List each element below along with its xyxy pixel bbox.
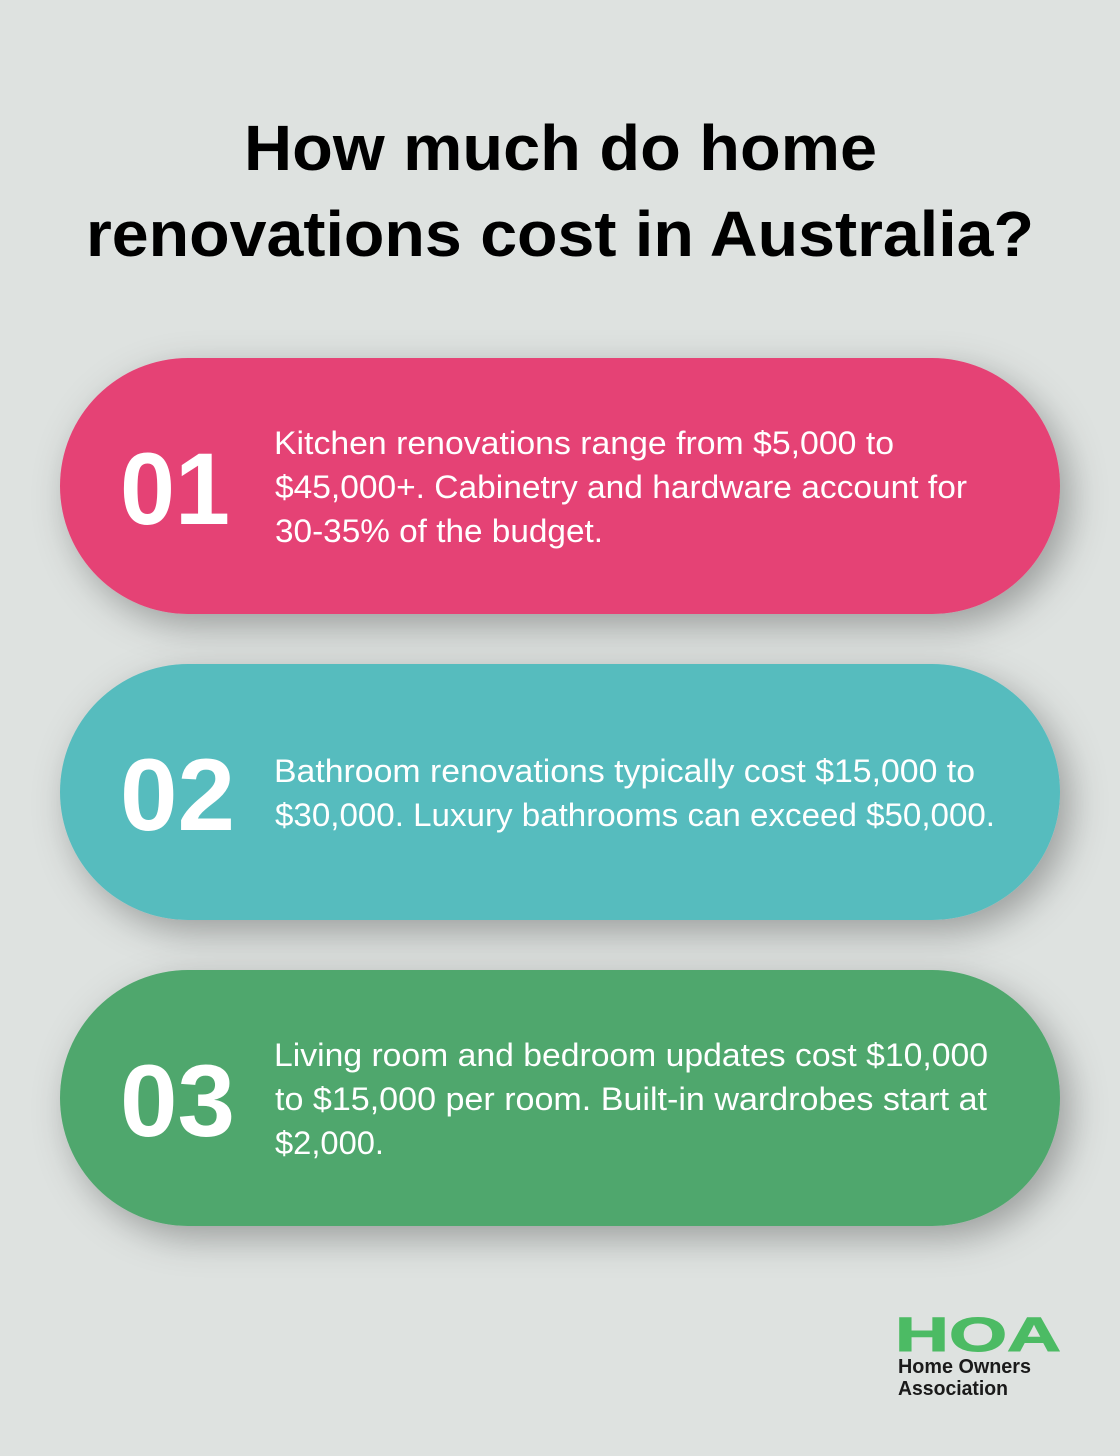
logo: Home Owners Association: HOA (895, 1309, 1061, 1362)
living room text (274, 1037, 988, 1161)
number 01: 01 (120, 432, 230, 546)
pink pill background (60, 358, 1060, 614)
title: renovations cost in Australia? (86, 198, 1034, 270)
kitchen text: Kitchen renovations range from $5,000 to (274, 425, 894, 461)
panel: living room and bedroom updates (60, 970, 1060, 1226)
kitchen text: 30-35% of the budget. (275, 513, 603, 549)
teal pill background (60, 664, 1060, 920)
number 02: 02 (120, 738, 235, 852)
title: How much do home (244, 112, 877, 184)
living room text: Living room and bedroom updates cost $10,000 (274, 1037, 988, 1073)
living room text: to $15,000 per room. Built-in wardrobes start at (275, 1081, 987, 1117)
panel: bathroom renovations (60, 664, 1060, 920)
living room text: $2,000. (275, 1125, 384, 1161)
panel: kitchen renovations (60, 358, 1060, 614)
kitchen text (274, 425, 967, 549)
bathroom text (274, 753, 995, 833)
logo: Home Owners Association: Home Owners (898, 1356, 1031, 1378)
bathroom text: Bathroom renovations typically cost $15,000 to (274, 753, 975, 789)
bathroom text: $30,000. Luxury bathrooms can exceed $50,000. (275, 797, 995, 833)
logo: Home Owners Association: Association (898, 1378, 1008, 1400)
green pill background (60, 970, 1060, 1226)
kitchen text: $45,000+. Cabinetry and hardware account for (275, 469, 967, 505)
title (86, 112, 1034, 270)
number 03: 03 (120, 1044, 235, 1158)
logo: Home Owners Association (895, 1309, 1061, 1400)
